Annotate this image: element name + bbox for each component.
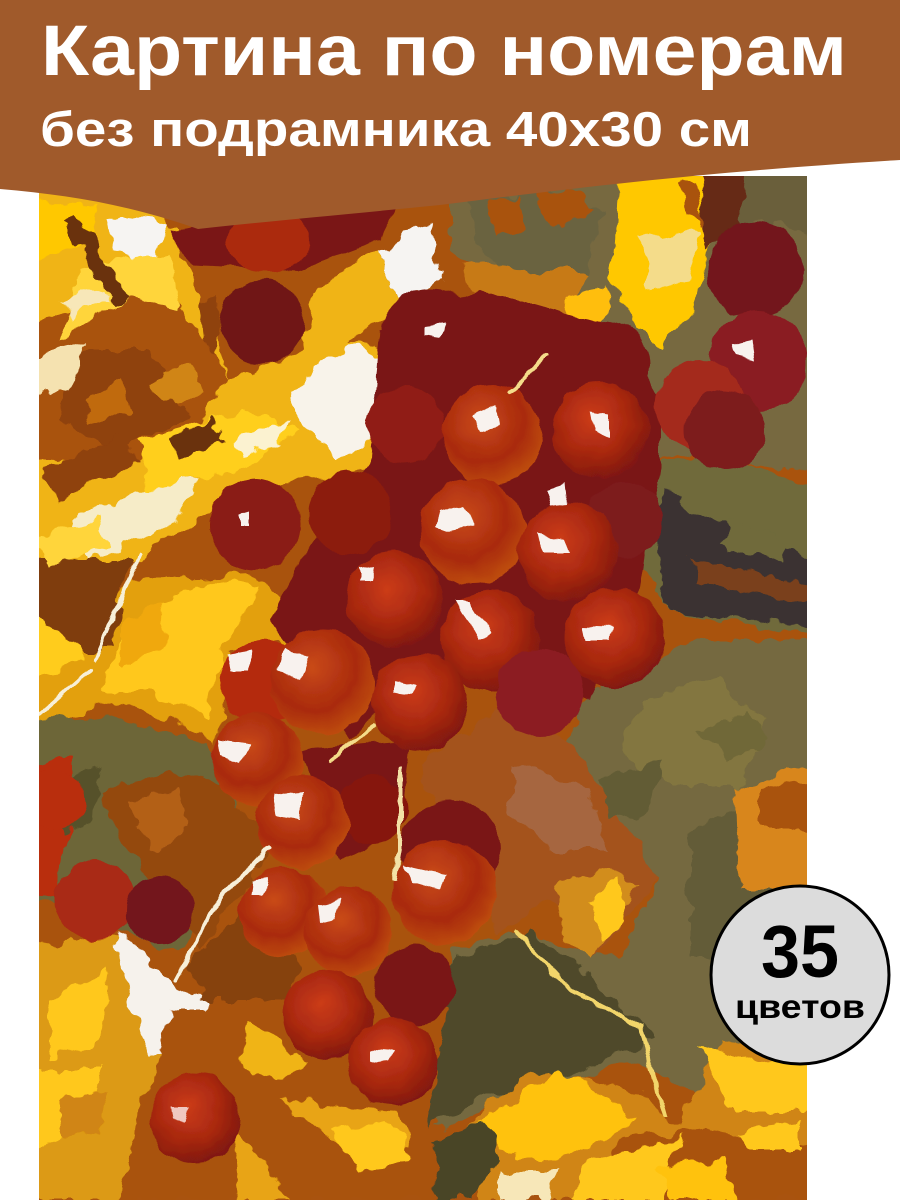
badge label: цветов <box>735 988 865 1025</box>
badge: 35 colours <box>711 886 889 1064</box>
yellow leaves left top <box>39 193 444 563</box>
pale stems <box>39 355 665 1115</box>
upper right yellow leaf <box>462 176 807 350</box>
title: Картина по номерам <box>41 12 847 91</box>
olive leaf background right <box>427 184 807 1133</box>
painting: autumn berries <box>39 176 807 1200</box>
lower left leaves <box>39 714 411 1200</box>
left middle yellow leaf <box>39 557 286 744</box>
subtitle: без подрамника 40х30 см <box>40 103 752 157</box>
paint flecks <box>40 180 800 1200</box>
badge number: 35 <box>761 910 839 993</box>
berry highlights <box>170 322 755 1122</box>
lower right leaves <box>430 767 807 1200</box>
central brown leaf <box>420 710 660 960</box>
berries <box>25 208 808 1163</box>
dark red shading behind berries <box>170 200 660 860</box>
banner <box>0 0 900 229</box>
